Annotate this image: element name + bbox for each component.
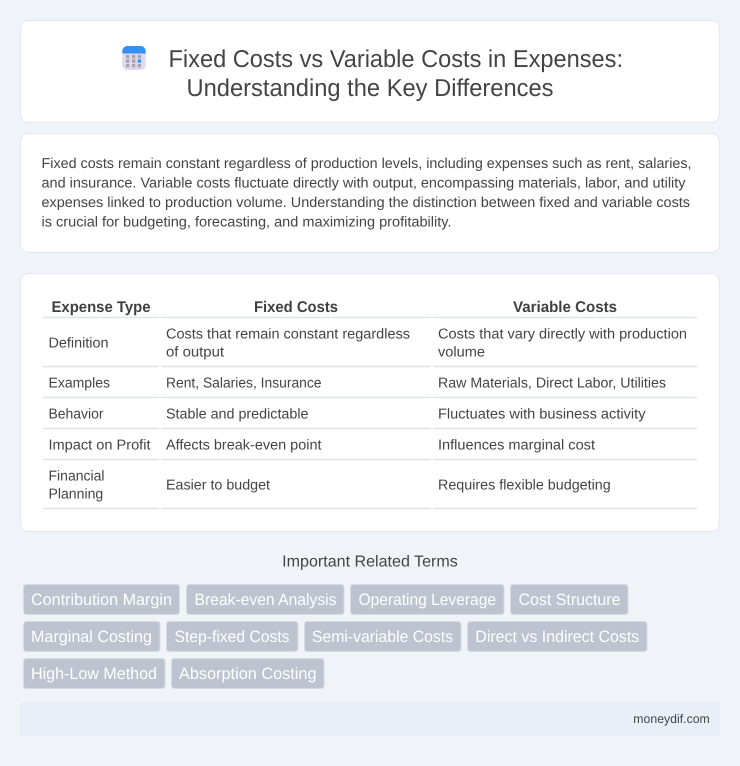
table row: definition: Definition	[48, 336, 108, 352]
table row: behavior: Fluctuates with business activity	[438, 406, 646, 422]
table row: financial planning: Financial	[48, 468, 104, 484]
heading: title: Fixed Costs vs Variable Costs in Expenses:	[168, 46, 623, 73]
footer: moneydif.com	[633, 712, 710, 726]
tag: marginal costing: Marginal Costing	[31, 628, 152, 646]
table row: definition: of output	[166, 344, 224, 360]
table row: examples: Raw Materials, Direct Labor, Utilities	[438, 376, 666, 392]
table row: definition: Costs that remain constant regardless	[166, 326, 410, 342]
table row: impact on profit: Impact on Profit	[48, 438, 150, 454]
tag: semi-variable costs	[304, 622, 461, 652]
text block: introduction: is crucial for budgeting, forecasting, and maximizing profitability.	[42, 214, 452, 230]
tag: contribution margin: Contribution Margin	[31, 591, 172, 609]
tag: direct vs indirect costs: Direct vs Indirect Costs	[475, 628, 639, 646]
table row: financial planning: Planning	[48, 486, 103, 502]
table row: examples: Rent, Salaries, Insurance	[166, 376, 322, 392]
table row: examples: Examples	[48, 376, 110, 392]
text block: introduction: and insurance. Variable costs fluctuate directly with output, encompassing materials, labor, and utility	[42, 176, 686, 192]
tag: contribution margin	[24, 584, 180, 614]
panel: title	[20, 20, 720, 122]
table row: financial planning: Easier to budget	[166, 478, 270, 494]
tag: direct vs indirect costs	[468, 622, 647, 652]
table row: financial planning	[48, 468, 611, 502]
tag: high-low method	[24, 658, 165, 688]
tag: operating leverage: Operating Leverage	[358, 591, 496, 609]
text block: introduction	[42, 156, 692, 230]
heading: title	[168, 46, 623, 102]
heading: important related terms: Important Related Terms	[282, 554, 458, 570]
tag: high-low method: High-Low Method	[31, 665, 157, 683]
table row: definition: Costs that vary directly with production	[438, 326, 687, 342]
table row: definition: volume	[438, 344, 485, 360]
tag: break-even analysis: Break-even Analysis	[194, 591, 336, 609]
text block: introduction: expenses linked to production volume. Understanding the distinction between fixed and variable costs	[42, 195, 690, 211]
panel: comparison table	[20, 274, 720, 532]
table header: Expense Type	[52, 299, 151, 316]
related terms tags	[24, 584, 647, 688]
text block: introduction: Fixed costs remain constant regardless of production levels, including expenses such as rent, salaries,	[42, 156, 692, 172]
table row: behavior: Stable and predictable	[166, 406, 308, 422]
table row: examples	[48, 376, 666, 392]
table row: behavior	[48, 406, 646, 422]
table header	[52, 299, 617, 316]
table row: definition	[48, 326, 687, 360]
tag: break-even analysis	[186, 584, 344, 614]
tag: cost structure	[510, 584, 628, 614]
table header: Variable Costs	[513, 299, 617, 316]
table header: Fixed Costs	[254, 299, 338, 316]
tag: semi-variable costs: Semi-variable Costs	[312, 628, 453, 646]
tag: operating leverage	[350, 584, 504, 614]
table row: behavior: Behavior	[48, 406, 104, 422]
tag: cost structure: Cost Structure	[518, 591, 620, 609]
heading: title: Understanding the Key Differences	[186, 75, 554, 102]
tag: absorption costing	[172, 658, 324, 688]
tag: marginal costing	[24, 622, 160, 652]
table row: impact on profit: Affects break-even point	[166, 438, 322, 454]
tag: step-fixed costs	[166, 622, 298, 652]
tag: step-fixed costs: Step-fixed Costs	[174, 628, 290, 646]
footer	[20, 702, 720, 736]
icon: calendar	[122, 46, 146, 70]
tag: absorption costing: Absorption Costing	[179, 665, 316, 683]
table row: impact on profit: Influences marginal cost	[438, 438, 595, 454]
table row: financial planning: Requires flexible budgeting	[438, 478, 611, 494]
table row: impact on profit	[48, 438, 595, 454]
panel: introduction	[20, 134, 720, 252]
